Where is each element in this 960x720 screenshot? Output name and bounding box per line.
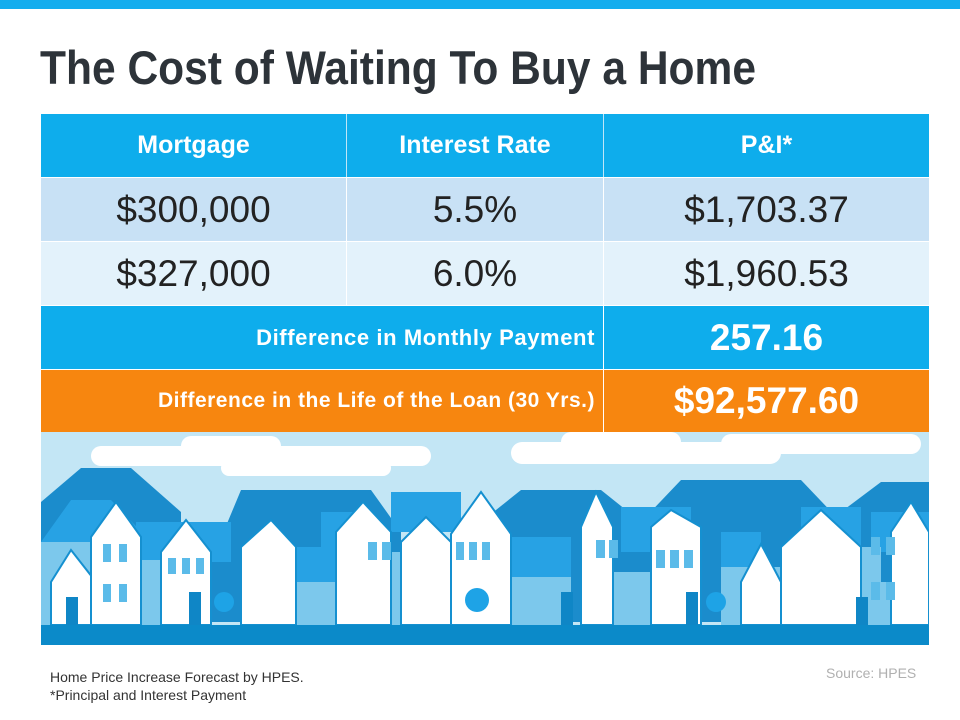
top bar (0, 0, 960, 9)
header row: P&I* (741, 131, 792, 159)
monthly difference row: 257.16 (710, 316, 823, 358)
row 2 (41, 242, 929, 305)
row 2: $327,000 (116, 252, 271, 294)
monthly difference row (41, 306, 929, 369)
header row: Interest Rate (399, 131, 551, 159)
footnote (50, 669, 304, 703)
footnote: *Principal and Interest Payment (50, 687, 246, 703)
row 1: $1,703.37 (684, 188, 849, 230)
footnote: Home Price Increase Forecast by HPES. (50, 669, 304, 685)
row 1 (41, 178, 929, 241)
title: The Cost of Waiting To Buy a Home (40, 41, 756, 94)
row 2: 6.0% (433, 252, 517, 294)
table (41, 114, 929, 432)
monthly difference row: Difference in Monthly Payment (256, 324, 595, 350)
row 2: $1,960.53 (684, 252, 849, 294)
source: Source: HPES (826, 665, 916, 681)
row 1: 5.5% (433, 188, 517, 230)
loan difference row: Difference in the Life of the Loan (30 Yrs.) (158, 389, 595, 412)
row 1: $300,000 (116, 188, 271, 230)
illustration: houses (41, 432, 929, 645)
loan difference row (41, 370, 929, 432)
loan difference row: $92,577.60 (674, 380, 859, 421)
header row (41, 114, 929, 177)
header row: Mortgage (137, 131, 250, 159)
